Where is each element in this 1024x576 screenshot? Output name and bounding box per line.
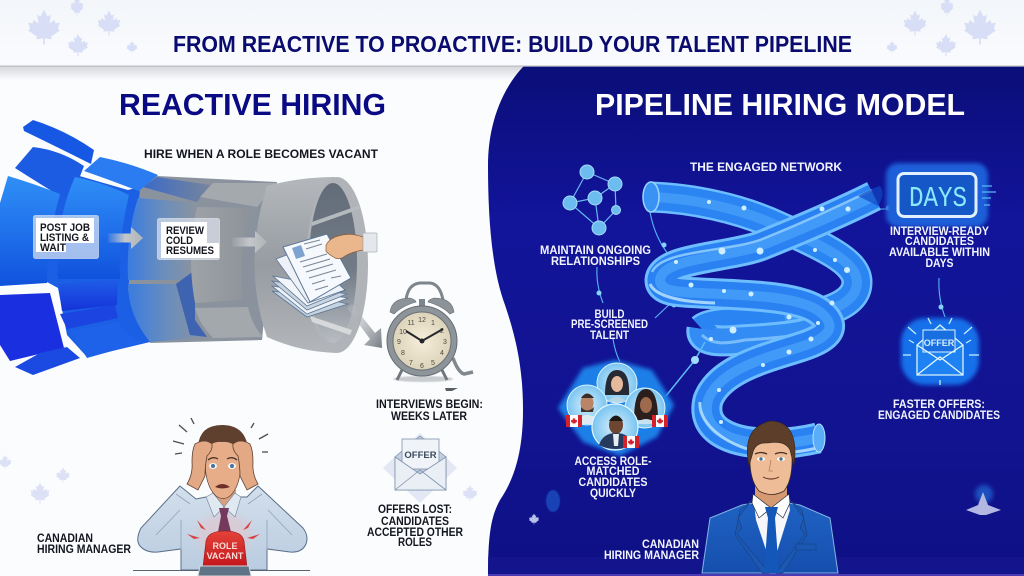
back strand [650,197,857,329]
icon: network nodes [563,165,622,235]
icon: resume stack and hand [272,233,377,317]
icon: alarm clock: 10 [399,329,407,336]
text: interview-ready candidates: AVAILABLE WITHIN [889,245,990,259]
text: interview-ready candidates: INTERVIEW-READY [890,224,989,238]
heading: reactive hiring: REACTIVE HIRING [119,87,386,122]
avatar: right [625,388,665,428]
eyes and mouth [208,458,237,488]
table line [133,570,310,571]
text: canadian hiring manager right: CANADIAN [642,537,699,551]
alarm sparks [187,520,260,539]
icon: lost offer envelope: OFFER [404,450,437,461]
step box: review cold resumes [158,218,220,260]
icon: glowing offer envelope: OFFER [924,338,955,348]
text: offers lost: ACCEPTED OTHER [367,525,463,539]
tie [764,507,779,573]
text: interview-ready candidates: CANDIDATES [905,234,974,248]
hair [198,425,248,452]
icon: alarm clock: 3 [443,339,447,346]
text: maintain relationships: MAINTAIN ONGOING [540,243,651,257]
icon: alarm clock: 11 [407,320,415,327]
text: offers lost: CANDIDATES [381,514,449,528]
hair [747,421,795,466]
decorative maple leaves right [529,485,1001,524]
icon: alarm clock: 12 [418,317,426,324]
decorative maple leaves left [0,455,477,504]
broken funnel illustration [0,120,368,375]
text: canadian hiring manager right: HIRING MANAGER [604,548,699,562]
hand and cuff [326,233,377,259]
text: offers lost: ROLES [398,535,432,549]
text: offers lost [367,502,463,549]
text: access role matched candidates: MATCHED [586,464,640,478]
heading: pipeline hiring model: PIPELINE HIRING MODEL [595,87,965,122]
text: access role matched candidates: CANDIDATES [578,475,648,489]
text: interviews begin [376,397,483,423]
panel: pipeline hiring background [488,66,1024,576]
sleeve details [156,494,292,550]
icon: glowing offer envelope [901,318,979,385]
text: faster offers [878,397,1000,422]
step box: post job listing: LISTING & [40,232,89,244]
text: interview-ready candidates: DAYS [926,256,954,270]
avatar: top [597,363,637,403]
neck [755,482,787,510]
eyes and mouth [755,452,787,479]
text: faster offers: FASTER OFFERS: [893,397,985,411]
icon: alarm clock: 6 [420,363,424,370]
text: offers lost: OFFERS LOST: [378,502,452,516]
connector lines [597,209,945,362]
tie [218,508,231,532]
front strand [650,190,874,453]
stress marks [173,418,268,454]
icon: days display [886,163,996,227]
paper stack [272,250,348,317]
text: maintain relationships: RELATIONSHIPS [551,254,640,268]
text: access role matched candidates: QUICKLY [590,486,636,500]
tube ends [643,182,659,212]
funnel mouth ring [254,177,368,353]
icon: alarm clock: 9 [397,339,401,346]
text: build pre-screened talent [571,307,648,342]
icon: days display: DAYS [909,182,967,215]
face [750,430,792,494]
hands [187,441,212,490]
icon: alarm clock: 1 [431,320,435,327]
text: canadian hiring manager right [604,537,699,562]
text: access role matched candidates: ACCESS ROLE- [574,454,652,468]
alarm beacon [203,531,247,567]
title: FROM REACTIVE TO PROACTIVE: BUILD YOUR TALENT PIPELINE [173,31,852,57]
funnel transition segments [128,176,277,343]
icon: alarm clock: 8 [401,350,405,357]
arrow: review to resumes [232,231,267,253]
arrow: to clock [347,304,382,348]
text: build pre-screened talent: TALENT [590,328,630,342]
figure: stressed hiring manager [133,418,310,576]
funnel grey segments [191,183,277,338]
step box: review cold resumes: RESUMES [166,245,214,257]
icon: alarm clock [387,283,473,391]
connector nodes [596,205,944,310]
step box: post job listing: POST JOB [40,222,90,234]
figure: confident hiring manager [702,421,838,573]
icon: alarm clock: 4 [440,350,444,357]
glowing nodes [674,200,850,424]
suit [702,500,838,573]
neck and collar [212,490,236,510]
connector: people to spiral [657,342,705,407]
pocket [796,544,816,550]
avatar: centre [592,404,638,450]
maple leaves header [28,0,996,56]
flags [566,415,668,448]
front resume [283,234,351,302]
text: build pre-screened talent: PRE-SCREENED [571,317,648,331]
figure: stressed hiring manager: VACANT [207,551,244,561]
text: maintain relationships [540,243,651,268]
text: canadian hiring manager left: HIRING MANAGER [37,542,131,556]
icon: alarm clock: 2 [440,328,444,335]
text: the engaged network: THE ENGAGED NETWORK [690,160,842,174]
text: interviews begin: INTERVIEWS BEGIN: [376,397,483,411]
text: interviews begin: WEEKS LATER [391,409,467,423]
text: interview-ready candidates [889,224,990,270]
chest glow [198,513,250,557]
shirt silhouette [138,486,307,570]
header band [0,0,1024,67]
subheading: hire when vacant: HIRE WHEN A ROLE BECOMES VACANT [144,147,379,161]
avatar: left [567,385,607,425]
icon: lost offer envelope [383,433,457,503]
step box: post job listing: WAIT [40,242,66,254]
step box: review cold resumes: REVIEW [166,225,205,237]
text: canadian hiring manager left: CANADIAN [37,531,93,545]
icon: alarm clock: 7 [409,360,413,367]
step box: post job listing [34,216,98,258]
icon: candidate group [558,360,674,456]
text: canadian hiring manager left [37,531,131,556]
lapels [735,500,769,573]
spiral pipeline [643,182,883,453]
arrow: post to review [108,227,143,249]
text: access role matched candidates [574,454,652,500]
lower return strand [702,323,826,343]
text: build pre-screened talent: BUILD [594,307,625,321]
collar [752,494,771,518]
text: faster offers: ENGAGED CANDIDATES [878,408,1000,422]
glow blob [558,360,674,456]
funnel blue segments [0,120,158,375]
step box: review cold resumes: COLD [166,235,193,247]
shirt [753,496,790,568]
head [205,440,241,498]
icon: alarm clock: 5 [431,360,435,367]
figure: stressed hiring manager: ROLE [212,541,238,551]
